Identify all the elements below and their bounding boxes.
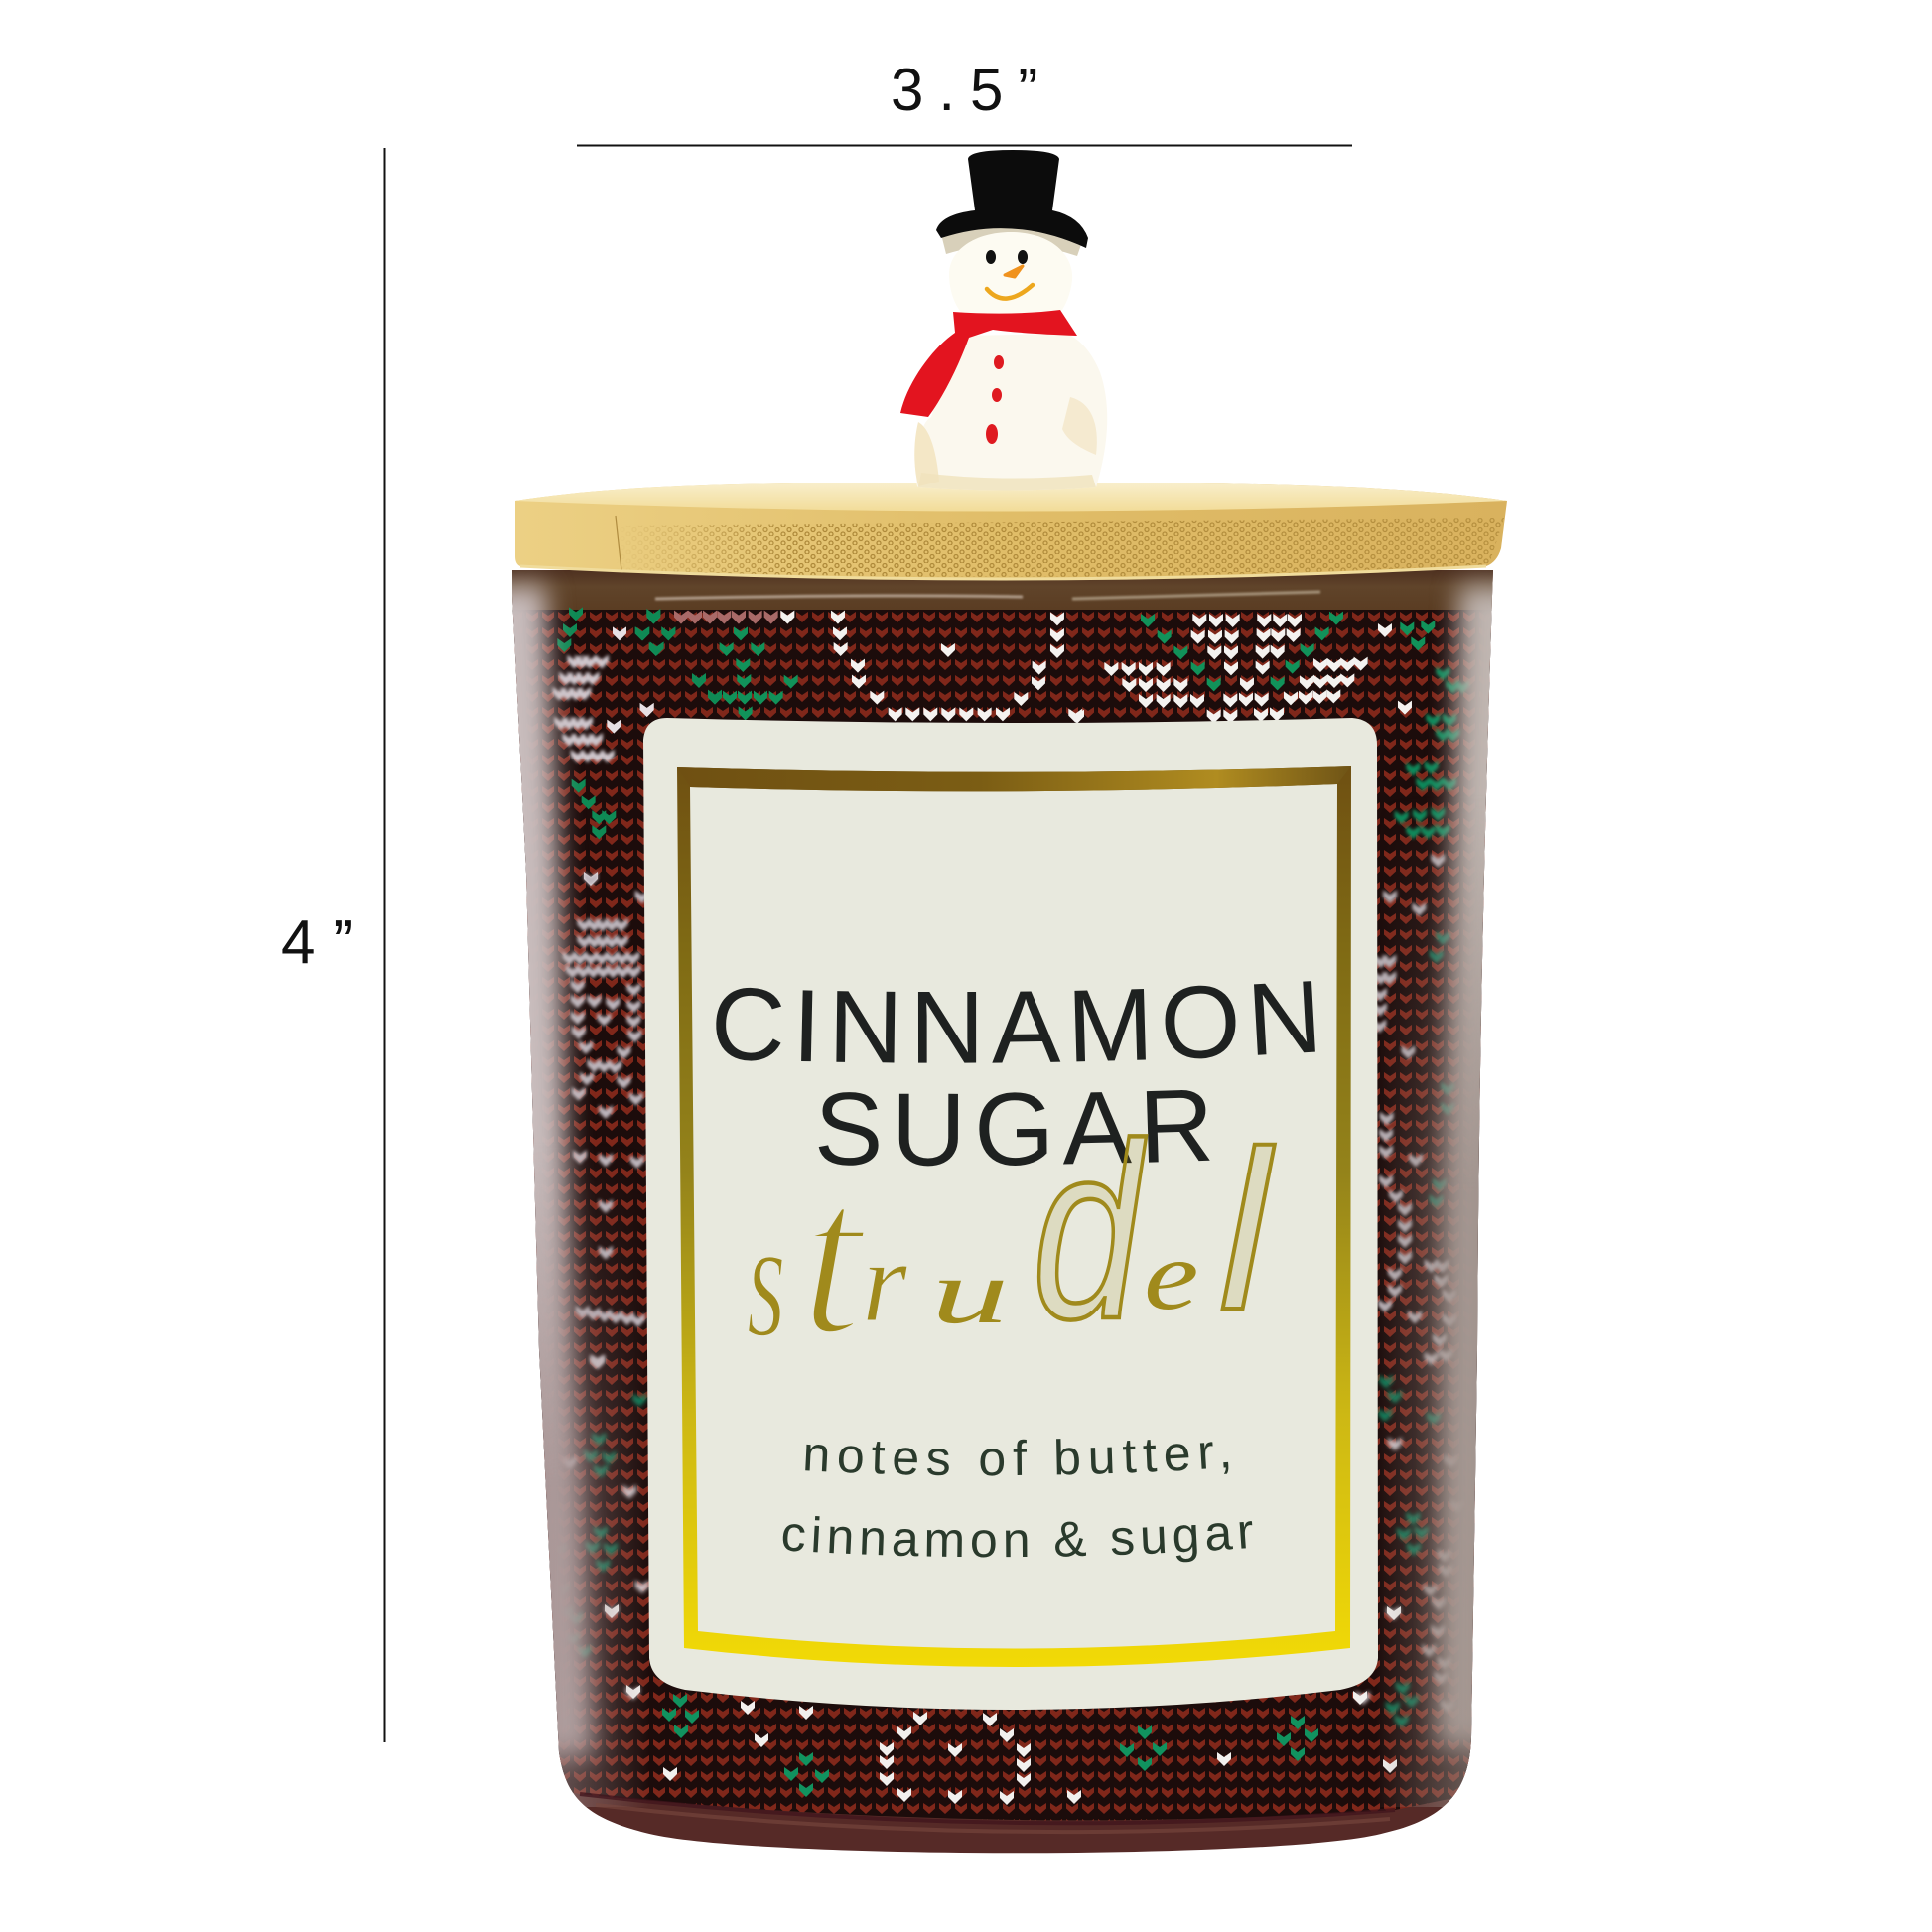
gold frame bbox=[677, 766, 1351, 1667]
knit stitches: white, upper right bbox=[1070, 614, 1412, 724]
snowman hat bbox=[941, 220, 1084, 256]
snowman buttons bbox=[994, 355, 1004, 369]
candle jar bbox=[512, 150, 1507, 1853]
glass edge haze bbox=[510, 586, 1494, 1832]
product illustration with dimensions bbox=[282, 68, 1507, 1853]
scent notes: notes of butter, bbox=[805, 1439, 1229, 1476]
knit stitches: green cluster right bbox=[1395, 666, 1469, 839]
jar glass and knit pattern bbox=[496, 556, 1509, 1876]
snowman head bbox=[949, 232, 1072, 320]
product label: cinnamon & sugar bbox=[782, 1516, 1253, 1563]
product name: strudel in gold script: r bbox=[862, 1216, 908, 1346]
snowman figurine bbox=[900, 150, 1107, 490]
product name: strudel in gold script bbox=[747, 1090, 1275, 1381]
product name: Cinnamon Sugar: CINNAMON bbox=[716, 981, 1315, 1063]
snowman body bbox=[916, 334, 1107, 490]
label paper bbox=[643, 718, 1378, 1710]
height measure: 4 inches: 4” bbox=[281, 908, 371, 977]
knit stitches: green, upper right bbox=[1141, 612, 1435, 691]
product name: strudel in gold script: s bbox=[747, 1186, 786, 1373]
knit stitches: right side bbox=[1372, 854, 1456, 1347]
knit stitches: white and green, upper left bbox=[552, 607, 722, 886]
width measure: 3.5 inches: 3.5” bbox=[891, 57, 1052, 123]
product name: strudel in gold script: e bbox=[1144, 1221, 1198, 1330]
product name: strudel in gold script: u bbox=[931, 1241, 1009, 1342]
product name: strudel in gold script: t bbox=[800, 1133, 868, 1381]
knit stitches: green bottom band bbox=[662, 1694, 1318, 1797]
product label bbox=[643, 718, 1378, 1710]
knit stitches: white, top band bbox=[640, 611, 1082, 723]
product name: strudel in gold script: l bbox=[1219, 1105, 1275, 1357]
knit stitches: snowman motif, left side bbox=[562, 872, 649, 1369]
knit stitches: lower left and lower right bbox=[552, 1348, 1464, 1727]
knit stitches: pink row bbox=[674, 611, 778, 624]
knit stitches: green, top band bbox=[635, 611, 798, 720]
product name: strudel in gold script: d bbox=[1033, 1090, 1147, 1371]
wooden lid bbox=[515, 483, 1507, 579]
knit stitches: white bottom band bbox=[605, 1604, 1401, 1805]
snowman scarf bbox=[900, 310, 1077, 417]
product label: SUGAR bbox=[818, 1090, 1210, 1166]
